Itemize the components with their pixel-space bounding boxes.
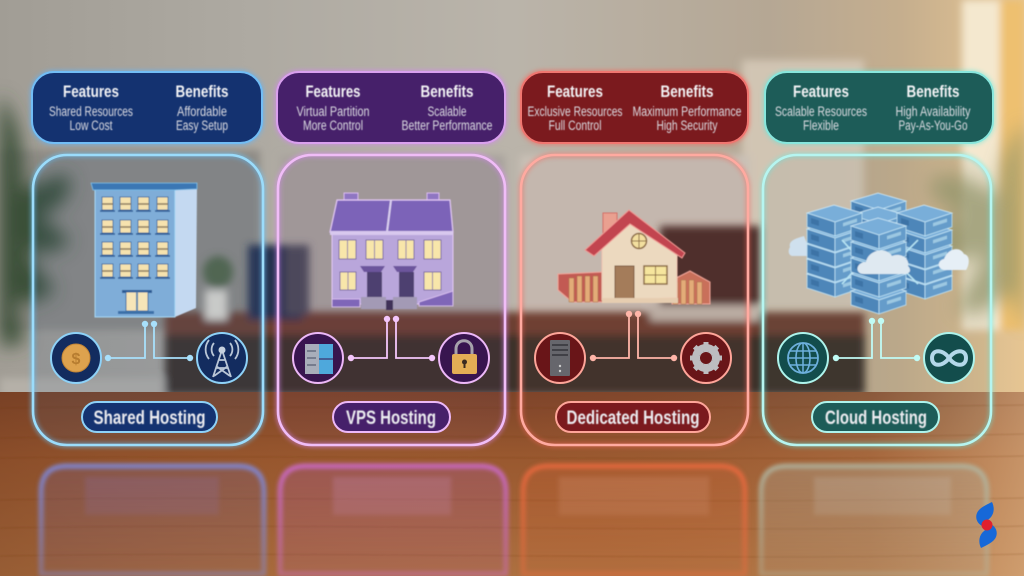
logo — [976, 502, 997, 548]
features and benefits card: Scalable Resources — [775, 104, 867, 119]
connector lines — [105, 321, 193, 361]
label: Cloud Hosting: Cloud Hosting — [825, 408, 927, 429]
connector lines — [348, 316, 435, 361]
label: Shared Hosting: Shared Hosting — [94, 408, 206, 429]
icon: server tower — [535, 333, 585, 383]
connector lines — [590, 311, 677, 361]
features and benefits card: Easy Setup — [176, 118, 228, 133]
icon: partitioned server — [293, 333, 343, 383]
features and benefits card: Features — [63, 83, 119, 101]
features and benefits card: Full Control — [548, 118, 602, 133]
icon: antenna tower — [197, 333, 247, 383]
features and benefits card: Features — [547, 83, 603, 101]
features and benefits card: Maximum Performance — [632, 104, 742, 119]
main card frame — [763, 155, 991, 445]
panel: Cloud Hosting — [763, 72, 993, 445]
icon: infinity — [924, 333, 974, 383]
main card frame — [278, 155, 505, 445]
features and benefits card: High Availability — [896, 104, 971, 119]
main card frame — [33, 155, 263, 445]
label: Dedicated Hosting: Dedicated Hosting — [566, 408, 700, 429]
features and benefits card — [277, 72, 505, 143]
features and benefits card: Features — [793, 83, 849, 101]
features and benefits card: High Security — [656, 118, 718, 133]
features and benefits card: Low Cost — [70, 118, 113, 133]
icon: townhouses — [330, 193, 453, 310]
features and benefits card: Affordable — [177, 104, 227, 119]
features and benefits card: Features — [306, 83, 360, 101]
main card frame — [521, 155, 748, 445]
panel: Dedicated Hosting — [521, 72, 748, 445]
icon: coin — [51, 333, 101, 383]
features and benefits card — [521, 72, 748, 143]
icon: server racks and clouds — [789, 193, 969, 314]
icon: coin: $ — [72, 351, 81, 368]
features and benefits card: Benefits — [906, 83, 960, 101]
features and benefits card: Better Performance — [402, 118, 492, 133]
features and benefits card: Flexible — [803, 118, 839, 133]
features and benefits card: Benefits — [176, 83, 228, 101]
icon: globe — [778, 333, 828, 383]
features and benefits card: Virtual Partition — [296, 104, 370, 119]
icon: apartment building — [91, 183, 197, 317]
panel: Shared Hosting — [32, 72, 263, 445]
icon: padlock — [439, 333, 489, 383]
wooden table — [0, 392, 1024, 576]
features and benefits card: Pay-As-You-Go — [898, 118, 968, 133]
panel: VPS Hosting — [277, 72, 505, 445]
label: Dedicated Hosting — [556, 402, 710, 432]
features and benefits card — [765, 72, 993, 143]
features and benefits card: Benefits — [420, 83, 474, 101]
features and benefits card: Benefits — [660, 83, 714, 101]
features and benefits card: Shared Resources — [49, 104, 133, 119]
features and benefits card — [32, 72, 262, 143]
features and benefits card: Scalable — [428, 104, 466, 119]
features and benefits card: Exclusive Resources — [528, 104, 623, 119]
table reflections — [41, 466, 987, 574]
background room — [0, 0, 1024, 400]
label: VPS Hosting: VPS Hosting — [346, 408, 436, 429]
label: Shared Hosting — [82, 402, 217, 432]
label: Cloud Hosting — [812, 402, 939, 432]
icon: house with fence — [558, 210, 710, 304]
icon: gear — [681, 333, 731, 383]
features and benefits card: More Control — [303, 118, 363, 133]
connector lines — [833, 318, 920, 361]
label: VPS Hosting — [333, 402, 450, 432]
